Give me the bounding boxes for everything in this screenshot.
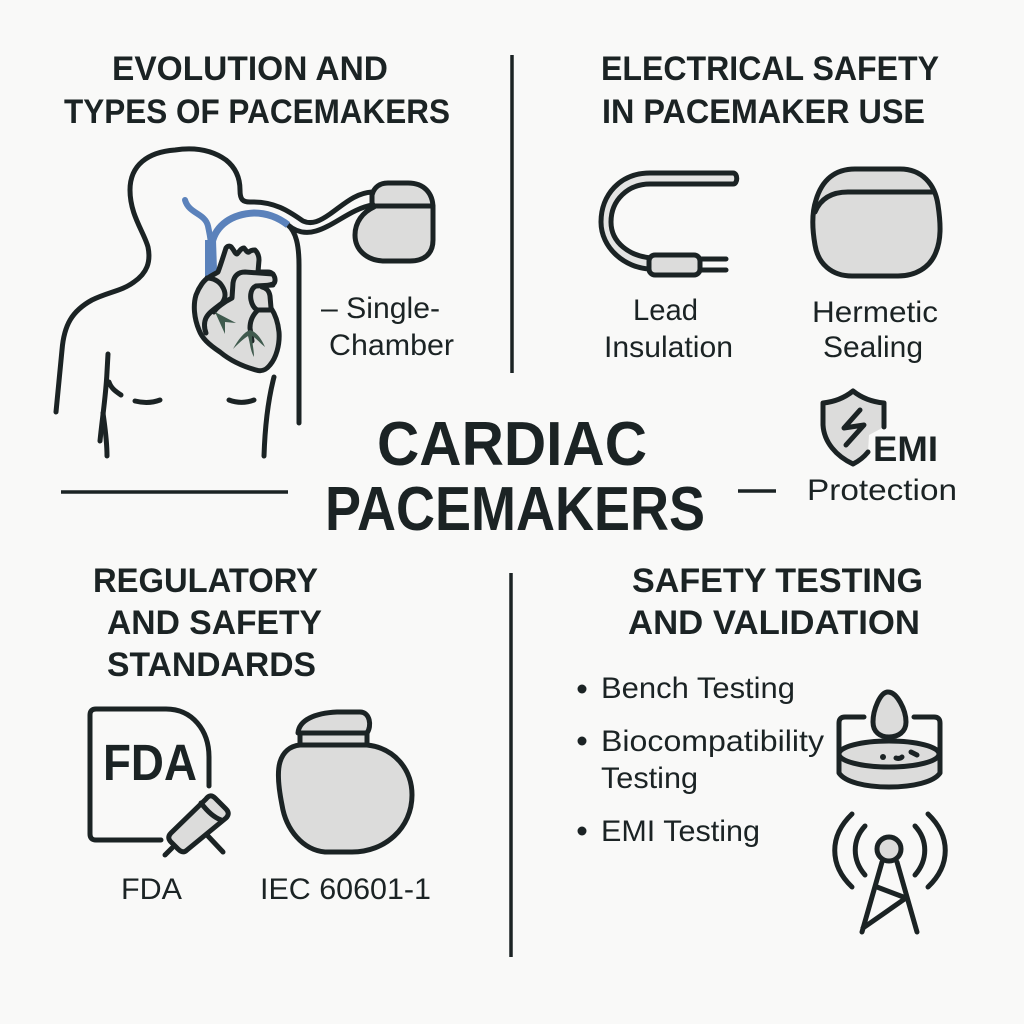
label: EMI protection: Protection [807,474,957,507]
panel: safety testing and validation [578,562,945,932]
label: single-chamber [321,292,454,362]
title: cardiac pacemakers [325,410,705,544]
heading: evolution and types: TYPES OF PACEMAKERS [64,93,450,131]
label: EMI protection: EMI [873,430,938,469]
icon: EMI shield [823,391,884,464]
icon: heart [194,246,279,371]
bullet list [578,672,824,848]
panel: evolution and types of pacemakers [56,50,454,456]
title: cardiac pacemakers: CARDIAC [377,410,647,479]
label: hermetic sealing [812,296,938,364]
icon: lead insulation [601,173,737,275]
label: hermetic sealing: Hermetic [812,296,938,329]
bullet list: Biocompatibility [601,725,824,758]
bullet list: Testing [601,762,698,795]
bullet list: EMI Testing [601,815,760,848]
heading: regulatory standards: STANDARDS [107,646,316,684]
panel: regulatory and safety standards [90,562,431,906]
label: single-chamber: Chamber [329,329,454,362]
icon: FDA document with syringe: FDA [103,734,197,791]
label: lead insulation [604,294,733,364]
label: IEC 60601-1: IEC 60601-1 [260,873,431,906]
heading: regulatory standards [93,562,322,684]
label: hermetic sealing: Sealing [823,331,923,364]
label: FDA: FDA [121,873,182,906]
heading: safety testing: AND VALIDATION [628,604,920,642]
panel: electrical safety in pacemaker use [601,50,957,507]
label: single-chamber: – Single- [321,292,440,325]
icon: hermetic sealing can [813,169,940,276]
heading: evolution and types [64,50,450,131]
label: EMI protection [807,430,957,507]
icon: IEC device [279,712,412,852]
heading: electrical safety: ELECTRICAL SAFETY [601,50,939,88]
heading: electrical safety: IN PACEMAKER USE [602,93,925,131]
icon: FDA document with syringe [90,709,228,855]
blue lead vein [185,200,288,279]
title: cardiac pacemakers: PACEMAKERS [325,475,705,544]
heading: evolution and types: EVOLUTION AND [112,50,388,88]
bullet list: Bench Testing [601,672,795,705]
pacemaker device [355,183,433,261]
heading: electrical safety [601,50,939,131]
heading: safety testing: SAFETY TESTING [632,562,923,600]
icon: petri dish with droplet [839,692,940,787]
icon: radio tower [835,814,945,932]
label: lead insulation: Insulation [604,331,733,364]
heading: regulatory standards: REGULATORY [93,562,318,600]
body outline [56,149,373,456]
heading: safety testing [628,562,923,642]
label: lead insulation: Lead [633,294,698,327]
heading: regulatory standards: AND SAFETY [107,604,322,642]
